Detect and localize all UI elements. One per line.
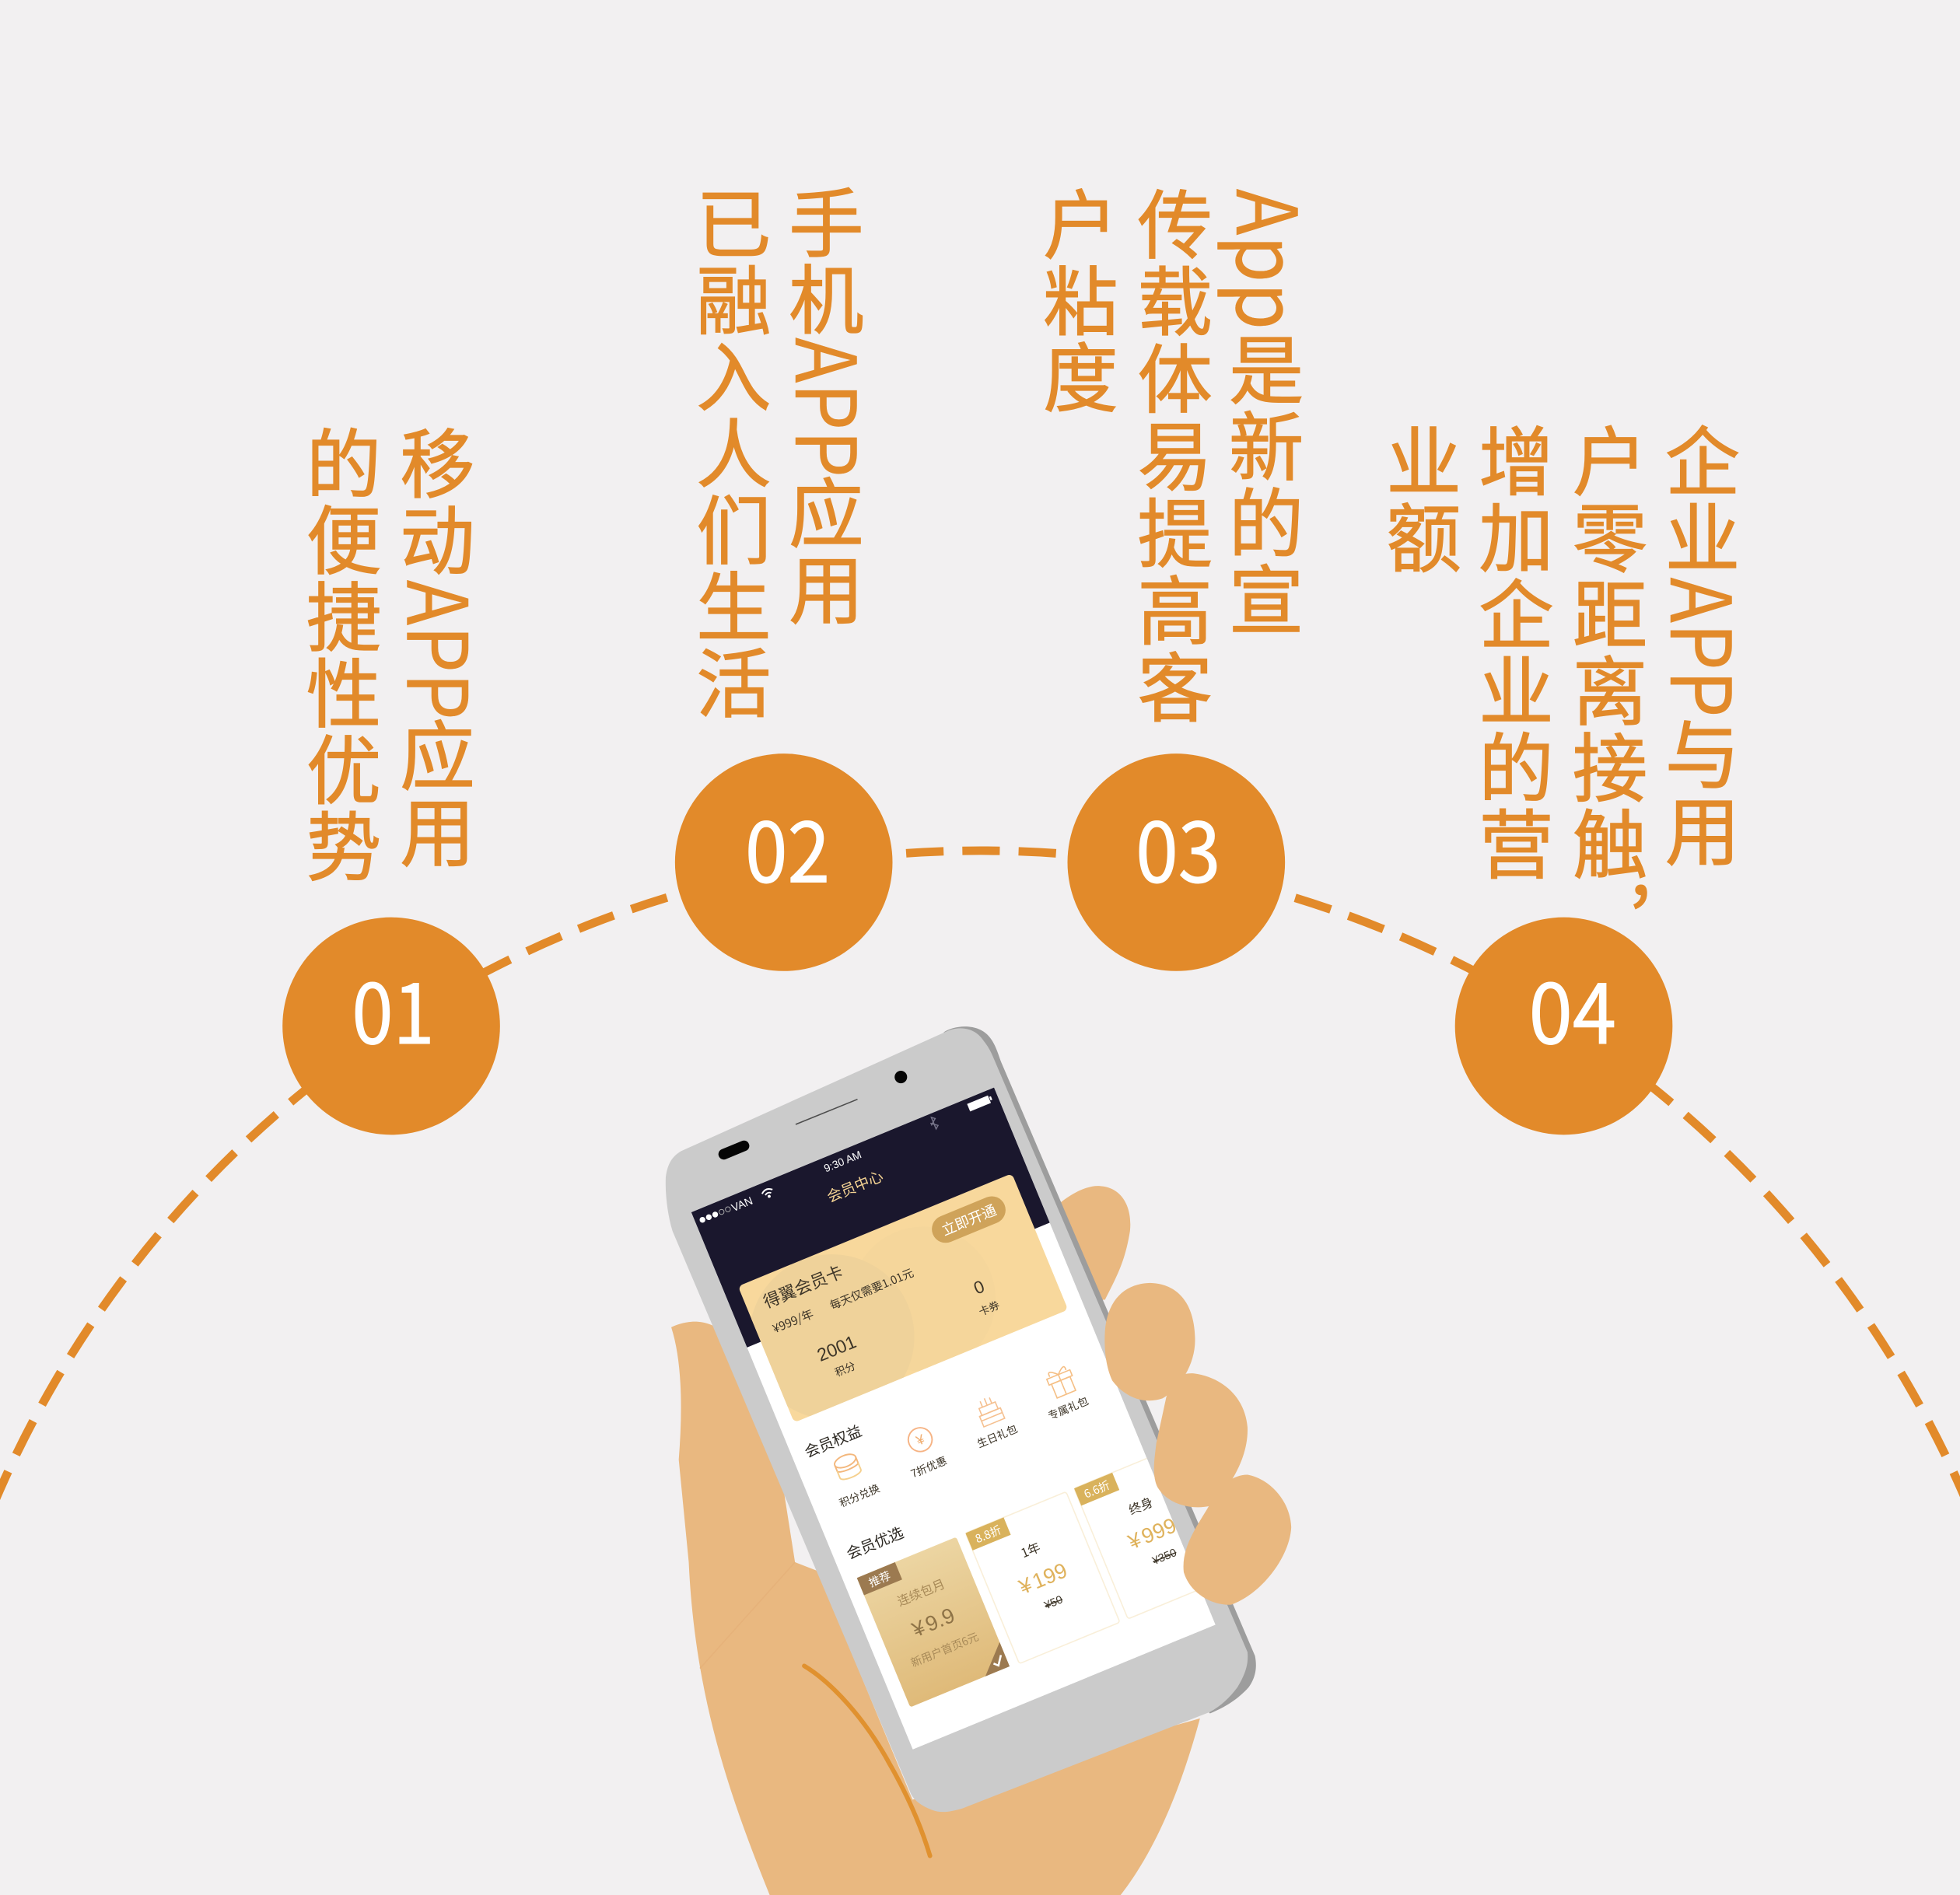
coupon value: 0 [971, 1277, 987, 1299]
benefit: exclusive gift: 专属礼包 [1045, 1392, 1090, 1423]
plan card: lifetime [1074, 1447, 1229, 1619]
plan card: lifetime: ¥350 [1150, 1547, 1178, 1568]
step 04: circle and number: 04 [1529, 948, 1616, 1068]
text block 02 [679, 185, 892, 722]
text block 04: 与用 [1648, 716, 1757, 869]
plan card: monthly: 连续包月 [894, 1574, 947, 1610]
plan card: one year: 1年 [1018, 1537, 1043, 1561]
benefits heading: 会员权益 [801, 1419, 865, 1462]
annual price: ¥999/年 [770, 1305, 816, 1337]
step 03: circle and number [1067, 753, 1285, 971]
text block 02: 手机 [772, 185, 880, 338]
text block 04: 企业 [1648, 423, 1757, 576]
benefit: birthday gift: 生日礼包 [975, 1420, 1020, 1451]
hand: fingers over the phone [1104, 1283, 1291, 1605]
screen background [691, 1088, 1216, 1750]
step 01: circle and number [282, 918, 500, 1135]
benefit: discount [896, 1422, 949, 1481]
little finger [1184, 1474, 1291, 1605]
text block 02: APP [772, 337, 892, 477]
plan card: monthly [857, 1537, 1010, 1708]
step 03: circle and number: 03 [1136, 787, 1220, 907]
plan card: monthly: ¥9.9 [908, 1603, 958, 1642]
plan card: monthly: 新用户首页6元 [908, 1629, 981, 1670]
time: 9:30 AM [822, 1148, 863, 1174]
hand: palm and thumb behind the phone [671, 1322, 1200, 1895]
hand: index finger behind the phone [1052, 1186, 1130, 1299]
plan card: lifetime: 终身 [1125, 1491, 1156, 1519]
step 02: circle and number [675, 753, 893, 971]
palm crease line [804, 1666, 930, 1856]
daily price: 每天仅需要1.01元 [827, 1264, 916, 1313]
text block 01 [289, 425, 503, 885]
text block 04 [1370, 423, 1767, 917]
battery icon [967, 1095, 993, 1111]
benefit: birthday gift [962, 1391, 1020, 1451]
step 04: circle and number [1455, 918, 1672, 1135]
recommended tag [857, 1562, 902, 1595]
phone side edge [943, 1026, 1256, 1713]
plan card: one year: 8.8折 [973, 1522, 1003, 1547]
selection heading: 会员优选 [843, 1521, 906, 1564]
points label: 积分 [832, 1357, 858, 1379]
benefit: points exchange [834, 1453, 880, 1507]
text block 03: 传载体易提高客 [1121, 187, 1230, 727]
dashed arc connecting the steps [0, 851, 1960, 1501]
benefit: discount: ¥ [913, 1432, 927, 1449]
plan card: one year [965, 1491, 1120, 1664]
benefit: discount: 7折优惠 [908, 1452, 949, 1481]
text block 04: , [1630, 808, 1651, 917]
text block 01: 应用 [383, 718, 492, 871]
plan card: lifetime: 6.6折 [1081, 1477, 1112, 1502]
header title: 会员中心 [824, 1165, 886, 1207]
plan card: lifetime: ¥999 [1124, 1512, 1180, 1554]
card name: 得翼会员卡 [759, 1259, 846, 1313]
wifi icon [761, 1188, 773, 1197]
benefit: points exchange: 积分兑换 [837, 1480, 882, 1510]
carrier: VAN [730, 1194, 754, 1214]
text block 04: 增加企业的营 [1461, 423, 1570, 883]
text block 02: 已融入人们生活 [679, 186, 788, 722]
text block 04: 业额 [1370, 423, 1479, 576]
step 01: circle and number: 01 [352, 948, 434, 1068]
status dots [700, 1207, 731, 1222]
plan card: one year: ¥50 [1042, 1593, 1065, 1613]
text block 04: 户零距离接触 [1556, 423, 1664, 883]
ring finger [1154, 1373, 1248, 1507]
check corner [975, 1642, 1010, 1676]
benefit: exclusive gift [1033, 1363, 1090, 1423]
speaker pill [717, 1139, 751, 1161]
text block 03: 是新的宣 [1212, 332, 1321, 638]
text block 03 [1026, 187, 1333, 727]
phone [666, 1026, 1256, 1812]
text block 01: 的便捷性优势 [289, 425, 398, 885]
member card [739, 1175, 1067, 1421]
text block 03: 户粘度 [1026, 187, 1135, 416]
middle finger [1104, 1283, 1195, 1400]
step 02: circle and number: 02 [745, 787, 830, 907]
coupon label: 卡券 [976, 1296, 1002, 1319]
text block 01: APP [383, 580, 503, 720]
text block 01: 移动 [383, 425, 492, 579]
plan card: one year: ¥199 [1015, 1558, 1070, 1600]
recommended tag: 推荐 [866, 1567, 893, 1591]
text block 03: App [1213, 189, 1333, 330]
phone body [666, 1028, 1248, 1812]
bluetooth icon [930, 1117, 939, 1131]
upgrade button: 立即开通 [938, 1199, 999, 1240]
earpiece line [796, 1100, 857, 1124]
camera [894, 1071, 907, 1083]
dark header [691, 1088, 1050, 1348]
text block 02: 应用 [772, 475, 880, 628]
text block 04: APP [1647, 578, 1767, 718]
phone screen [691, 1076, 1243, 1750]
points value: 2001 [814, 1331, 859, 1365]
